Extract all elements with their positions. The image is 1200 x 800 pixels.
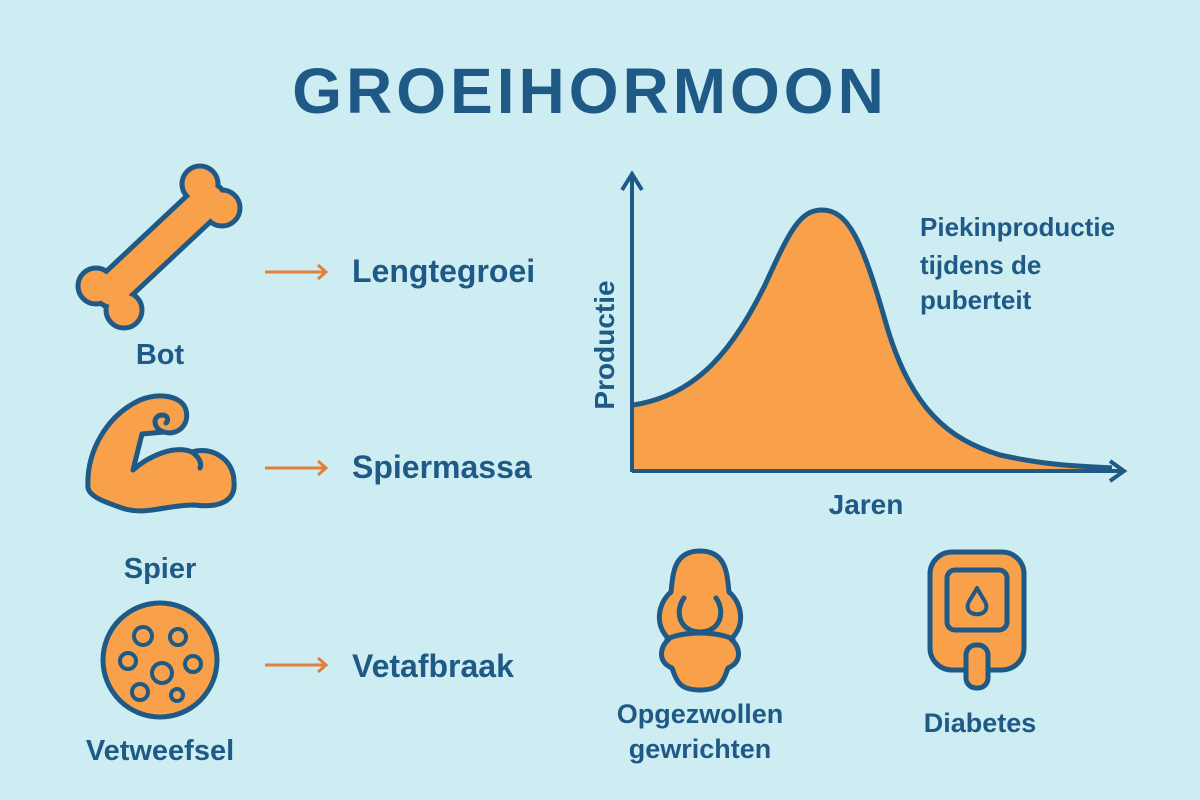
label: Bot: Bot bbox=[136, 339, 184, 371]
label: Opgezwollen gewrichten: Opgezwollen bbox=[617, 699, 783, 729]
label: Spier: Spier bbox=[124, 553, 196, 585]
icon: knee bbox=[659, 551, 741, 690]
callout: peak: puberteit bbox=[920, 285, 1032, 315]
label: Productie axis: Productie bbox=[589, 280, 620, 410]
icon: glucose meter bbox=[930, 552, 1024, 688]
title: GROEIHORMOON bbox=[292, 55, 888, 127]
label: Diabetes: Diabetes bbox=[924, 708, 1036, 738]
label: Lengtegroei: Lengtegroei bbox=[352, 253, 535, 289]
arrow: bone bbox=[265, 265, 326, 279]
label: Opgezwollen gewrichten: gewrichten bbox=[629, 734, 771, 764]
arrow: muscle bbox=[265, 461, 326, 475]
label: Vetweefsel: Vetweefsel bbox=[86, 735, 234, 767]
icon: fat cell bbox=[103, 603, 217, 717]
label: Jaren: Jaren bbox=[829, 489, 903, 520]
icon: bone bbox=[76, 164, 242, 330]
callout: peak: Piekinproductie bbox=[920, 212, 1115, 242]
label: Vetafbraak: Vetafbraak bbox=[352, 648, 514, 684]
callout: peak: tijdens de bbox=[920, 250, 1041, 280]
label: Spiermassa: Spiermassa bbox=[352, 449, 532, 485]
arrow: fat bbox=[265, 658, 326, 672]
icon: arm bbox=[88, 396, 234, 511]
chart: production curve bbox=[622, 174, 1124, 481]
